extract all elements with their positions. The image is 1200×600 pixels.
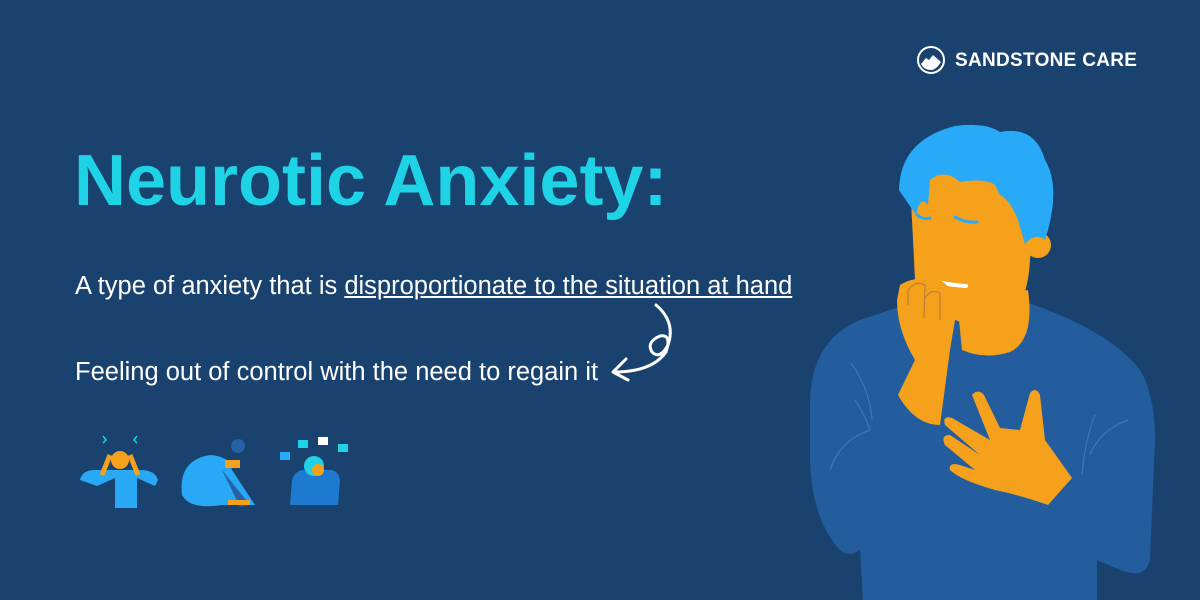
hand on chest <box>943 390 1072 505</box>
arrow <box>611 303 672 382</box>
icon: person holding head <box>80 436 158 508</box>
logo: SANDSTONE CARE <box>955 50 1137 71</box>
icon: person hugging knees <box>182 439 255 507</box>
illustration: anxious man <box>810 124 1155 600</box>
head <box>899 125 1053 327</box>
logo <box>917 46 1137 74</box>
text: definition: A type of anxiety that is disproportionate to the situation at hand <box>75 272 792 300</box>
text: out of control: Feeling out of control with the need to regain it <box>75 358 598 386</box>
title: Neurotic Anxiety: <box>74 141 667 221</box>
icons row <box>80 436 348 508</box>
neck <box>957 290 1030 356</box>
body <box>810 290 1155 600</box>
hand at mouth <box>897 278 955 425</box>
icon: person with puzzle pieces <box>280 437 348 505</box>
